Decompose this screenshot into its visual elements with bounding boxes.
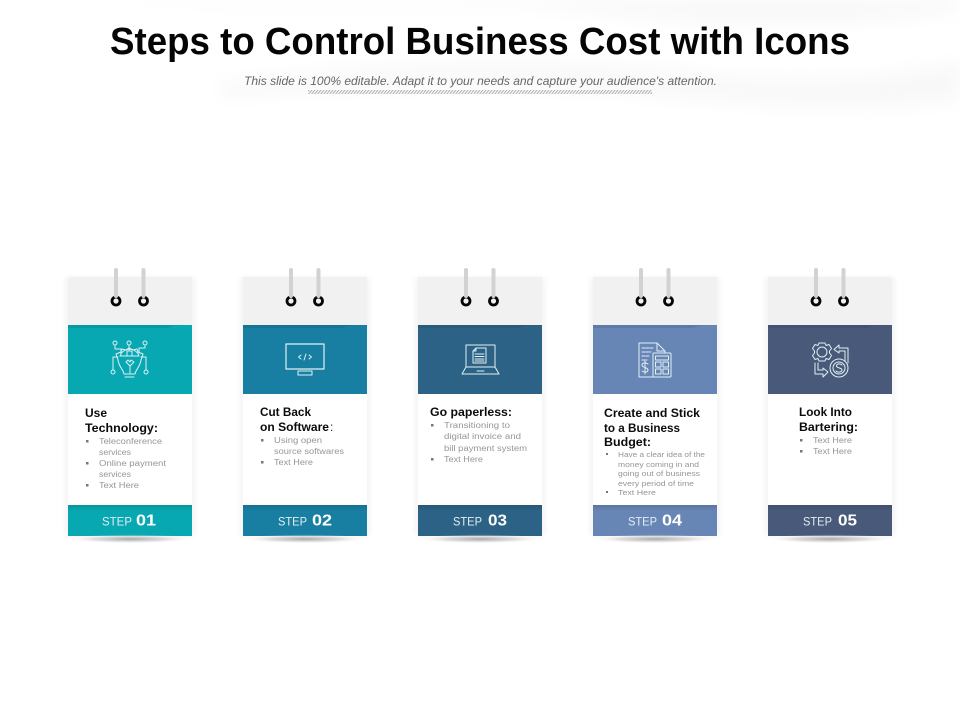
step label 01 [102,512,156,530]
step label 05: STEP [803,516,832,528]
text: use technology: Text Here [99,481,140,490]
text: look into bartering: Text Here [813,436,853,445]
text: create and stick to a business budget: Budget: [604,437,651,449]
text: go paperless: Go paperless: [430,407,512,419]
text: create and stick to a business budget: every period of time [618,479,694,488]
binder strings and rings [287,268,322,305]
step label 01: STEP [102,516,132,528]
step label 05: 05 [838,512,857,530]
text: go paperless: digital invoice and [444,432,521,441]
text: use technology: Technology: [85,423,158,435]
text: go paperless [430,407,527,464]
step label 03: STEP [453,516,482,528]
step label 02: 02 [312,512,332,530]
step label 01: 01 [136,512,156,530]
binder strings and rings [112,268,148,305]
text: look into bartering: Text Here [813,447,853,456]
text: use technology: Online payment [99,459,167,468]
step label 04 [628,512,682,530]
text: look into bartering: Bartering: [799,422,858,434]
text: cut back on software: : [330,422,333,434]
text: cut back on software: Text Here [274,458,314,467]
text: use technology: services [99,470,131,479]
title: Steps to Control Business Cost with Icons [110,21,850,63]
icon: gear and currency exchange [812,343,848,377]
step label 03: 03 [488,512,507,530]
text: use technology: Use [85,408,107,420]
text: cut back on software: Cut Back [260,407,312,419]
text: cut back on software: source softwares [274,447,344,456]
step label 02: STEP [278,516,307,528]
icon: laptop with document [462,345,499,374]
text: cut back on software [260,407,344,467]
icon: technology bulb with gear and circuits [111,341,148,377]
text: look into bartering [799,407,858,456]
text: look into bartering: Look Into [799,407,852,419]
text: use technology: services [99,448,131,457]
text: create and stick to a business budget: Have a clear idea of the [618,450,705,459]
text: create and stick to a business budget [604,408,705,497]
text: use technology [85,408,167,490]
binder strings and rings [812,268,848,305]
hatched underline [308,90,652,94]
step label 03 [453,512,507,530]
icon: code monitor [286,344,324,375]
step label 04: 04 [662,512,682,530]
text: create and stick to a business budget: going out of business [618,469,700,478]
subtitle: This slide is 100% editable. Adapt it to your needs and capture your audience's attention. [244,74,717,88]
text: create and stick to a business budget: Create and Stick [604,408,701,420]
step label 04: STEP [628,516,657,528]
icon: bill and calculator [639,343,671,377]
binder strings and rings [462,268,498,305]
text: create and stick to a business budget: money coming in and [618,460,699,469]
binder strings and rings [637,268,672,305]
text: create and stick to a business budget: Text Here [618,488,656,497]
text: create and stick to a business budget: to a Business [604,423,680,435]
text: cut back on software: Using open [274,436,322,445]
text: use technology: Teleconference [99,437,163,446]
text: go paperless: Transitioning to [444,421,511,430]
panel: step 03 [415,268,545,544]
step label 05 [803,512,857,530]
panel: step 01 [65,268,195,544]
text: go paperless: Text Here [444,455,484,464]
panel: step 05 [765,268,895,544]
panel: step 02 [240,268,370,544]
panel: step 04 [590,268,720,544]
text: cut back on software: on Software [260,422,329,434]
text: go paperless: bill payment system [444,444,527,453]
step label 02 [278,512,332,530]
